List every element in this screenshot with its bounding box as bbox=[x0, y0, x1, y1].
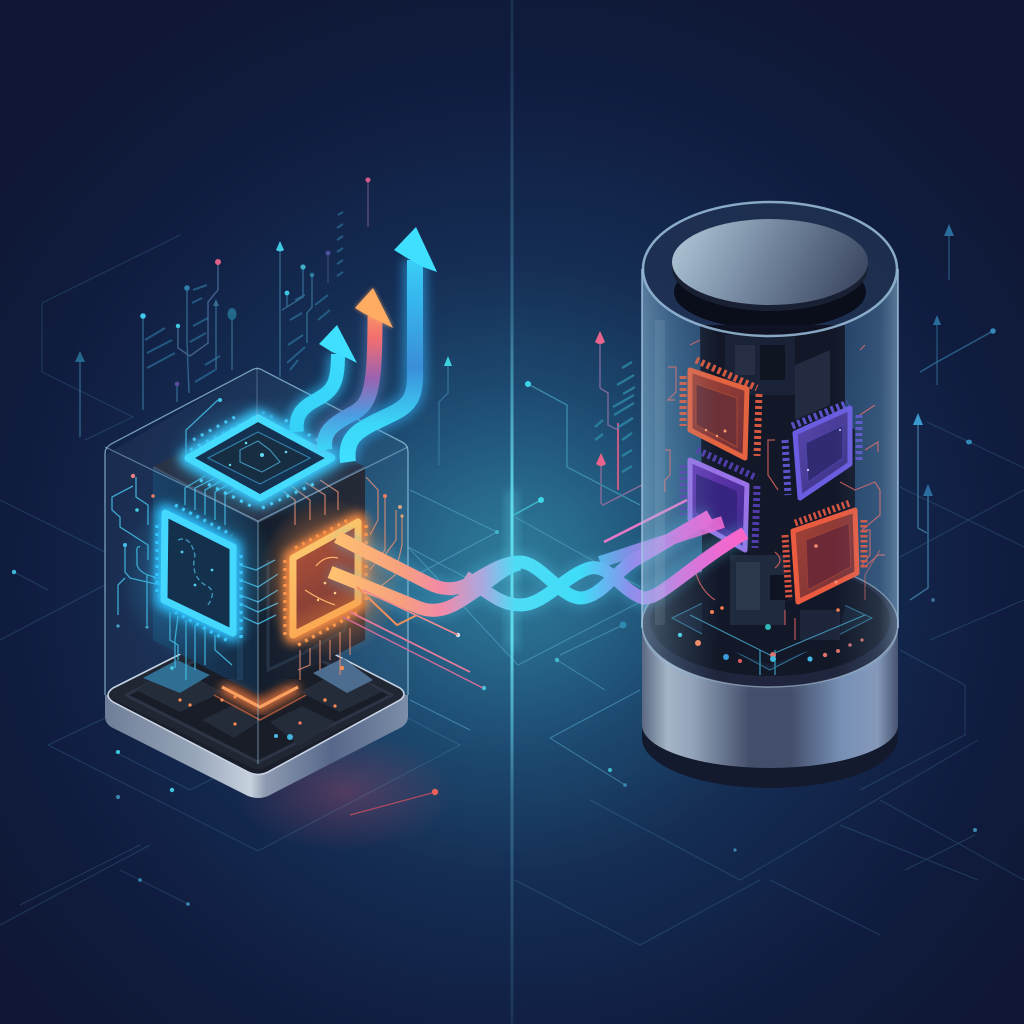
right pad bbox=[313, 658, 373, 693]
upper strand bbox=[337, 516, 710, 598]
data streams bbox=[330, 500, 745, 688]
top chip pins bbox=[190, 412, 325, 508]
arrow 1 cyan bbox=[297, 325, 357, 432]
floor glow red bbox=[235, 732, 455, 852]
rising arrows bbox=[297, 227, 437, 462]
left cube bbox=[105, 367, 408, 798]
strand to chip middle bbox=[600, 522, 723, 562]
pin heads left bbox=[75, 178, 452, 386]
arrow 2 orange bbox=[324, 288, 393, 450]
cylinder bbox=[642, 202, 898, 788]
vertical centre divider bbox=[506, 0, 518, 1024]
left circuit traces bbox=[112, 400, 278, 680]
cube column faces bbox=[153, 412, 365, 695]
right circuit traces bbox=[275, 477, 402, 680]
background data pins right bbox=[514, 230, 993, 600]
arrow 3 cyan-blue bbox=[347, 227, 437, 462]
middle strand bbox=[330, 564, 520, 610]
red chip lower right bbox=[785, 503, 864, 602]
cylinder top collar bbox=[644, 203, 896, 335]
right chip bbox=[258, 498, 402, 658]
base dots bbox=[170, 666, 344, 740]
background data pins left bbox=[80, 180, 448, 465]
cylinder dark bowl bbox=[642, 561, 898, 687]
left chip pins bbox=[157, 505, 241, 642]
scattered background dots bbox=[12, 530, 977, 906]
cylinder top disc bbox=[672, 219, 868, 311]
left pad bbox=[143, 660, 210, 693]
thin orange traces bbox=[357, 587, 417, 625]
orange glowing corner bbox=[214, 687, 306, 720]
isometric background grid lines bbox=[0, 235, 1024, 945]
cube base plate top bbox=[108, 618, 404, 774]
right circuit dots bbox=[116, 398, 404, 629]
stream glow bbox=[330, 516, 745, 610]
cylinder metal band bbox=[642, 625, 898, 768]
cylinder base dots bbox=[678, 606, 864, 663]
cylinder bottom foot bbox=[642, 725, 898, 788]
cylinder inner chip stack bbox=[690, 325, 865, 675]
right chip pins bbox=[285, 519, 366, 645]
cylinder traces bbox=[665, 340, 885, 640]
purple chip top right bbox=[785, 403, 859, 498]
glass box bbox=[105, 367, 408, 770]
cube base plate side bbox=[105, 695, 408, 798]
red chip top left bbox=[683, 360, 759, 458]
left chip bbox=[118, 487, 278, 663]
top chip bbox=[165, 396, 355, 520]
lower wave strand bbox=[465, 533, 745, 605]
cylinder back glass bbox=[642, 202, 898, 660]
purple chip lower left bbox=[683, 450, 757, 550]
thin pink line bbox=[604, 500, 687, 542]
pin heads right bbox=[525, 224, 996, 503]
cylinder front glass bbox=[642, 202, 898, 691]
